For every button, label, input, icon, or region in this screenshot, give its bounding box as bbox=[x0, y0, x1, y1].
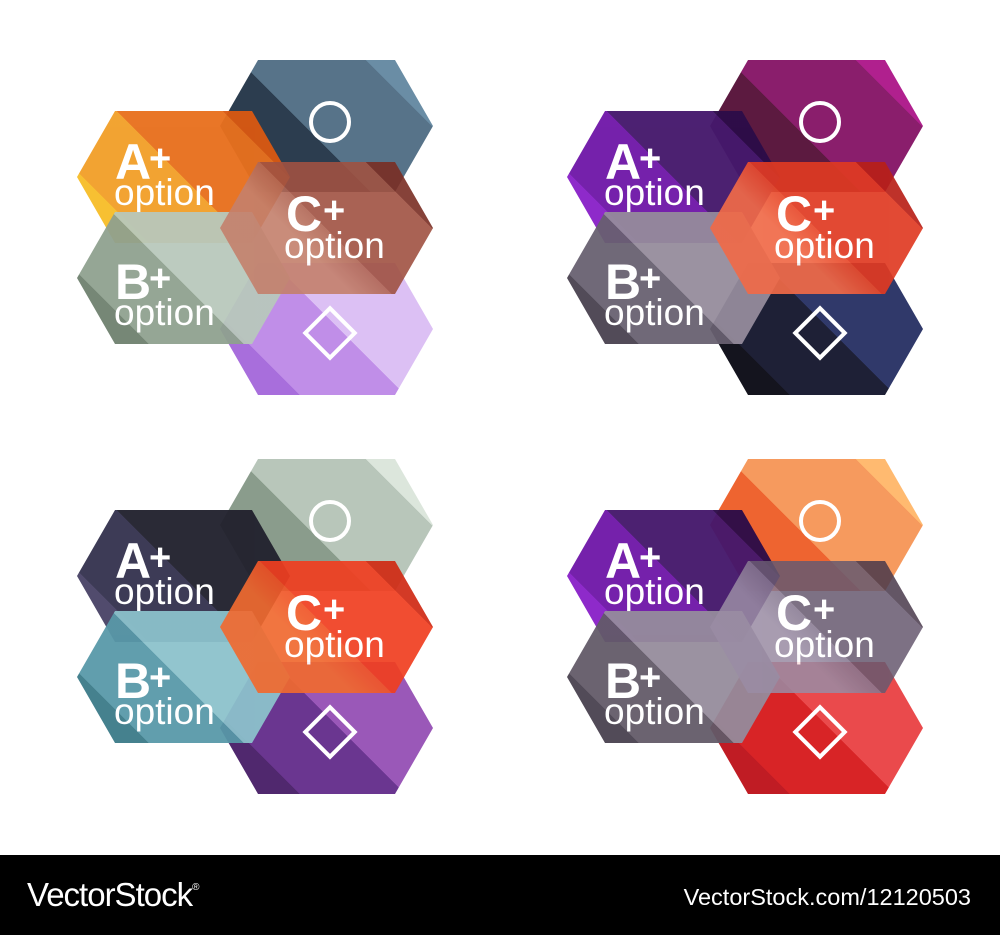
hexagon: B+ option bbox=[567, 611, 780, 743]
hexagon: A+ option: A bbox=[605, 134, 641, 190]
hexagon: A+ option: option bbox=[114, 571, 215, 612]
hexagon: C+ option: + bbox=[813, 190, 835, 232]
hexagon: circle (top) bbox=[710, 60, 923, 192]
footer band bbox=[0, 855, 1000, 935]
hexagon: A+ option bbox=[77, 111, 290, 243]
hexagon: C+ option: C bbox=[286, 585, 322, 641]
hexagon: A+ option bbox=[77, 510, 290, 642]
hexagon: B+ option: option bbox=[604, 691, 705, 732]
hexagon: A+ option: option bbox=[604, 571, 705, 612]
hexagon: C+ option: option bbox=[774, 225, 875, 266]
hexagon: A+ option: option bbox=[604, 172, 705, 213]
hexagon: B+ option: + bbox=[149, 258, 171, 300]
hexagon: A+ option: A bbox=[605, 533, 641, 589]
hexagon: A+ option: + bbox=[639, 537, 661, 579]
hexagon: circle (top) bbox=[710, 459, 923, 591]
hexagon: C+ option: option bbox=[284, 624, 385, 665]
group 1: top-left option set bbox=[77, 60, 433, 395]
hexagon: A+ option: + bbox=[149, 537, 171, 579]
hexagon: C+ option bbox=[710, 162, 923, 294]
hexagon: A+ option bbox=[567, 510, 780, 642]
hexagon: C+ option: C bbox=[286, 186, 322, 242]
group 2: top-right option set bbox=[567, 60, 923, 395]
hexagon: A+ option bbox=[567, 111, 780, 243]
hexagon: B+ option bbox=[77, 611, 290, 743]
hexagon: C+ option bbox=[710, 561, 923, 693]
hexagon: A+ option: A bbox=[115, 134, 151, 190]
hexagon: B+ option: B bbox=[605, 653, 641, 709]
hexagon: C+ option: option bbox=[774, 624, 875, 665]
footer: brand logo text: VectorStock bbox=[27, 876, 192, 913]
hexagon: diamond (bottom) bbox=[220, 263, 433, 395]
hexagon: diamond (bottom) bbox=[710, 662, 923, 794]
hexagon: C+ option: + bbox=[323, 190, 345, 232]
hexagon: A+ option: + bbox=[639, 138, 661, 180]
hexagon: B+ option: option bbox=[604, 292, 705, 333]
hexagon: C+ option: option bbox=[284, 225, 385, 266]
hexagon: B+ option: B bbox=[115, 254, 151, 310]
hexagon: B+ option: + bbox=[639, 258, 661, 300]
hexagon: C+ option: C bbox=[776, 585, 812, 641]
hexagon: circle (top) bbox=[220, 60, 433, 192]
hexagon: C+ option: + bbox=[813, 589, 835, 631]
hexagon: diamond (bottom) bbox=[220, 662, 433, 794]
hexagon: A+ option: A bbox=[115, 533, 151, 589]
hexagon: B+ option: + bbox=[149, 657, 171, 699]
group 3: bottom-left option set bbox=[77, 459, 433, 794]
hexagon: diamond (bottom) bbox=[710, 263, 923, 395]
hexagon: B+ option bbox=[567, 212, 780, 344]
hexagon: B+ option: B bbox=[115, 653, 151, 709]
hexagon: B+ option bbox=[77, 212, 290, 344]
hexagon: A+ option: option bbox=[114, 172, 215, 213]
hexagon: C+ option bbox=[220, 561, 433, 693]
hexagon: B+ option: + bbox=[639, 657, 661, 699]
hexagon: circle (top) bbox=[220, 459, 433, 591]
hexagon: B+ option: option bbox=[114, 292, 215, 333]
hexagon: C+ option: + bbox=[323, 589, 345, 631]
hexagon: C+ option bbox=[220, 162, 433, 294]
group 4: bottom-right option set bbox=[567, 459, 923, 794]
hexagon: C+ option: C bbox=[776, 186, 812, 242]
hexagon: A+ option: + bbox=[149, 138, 171, 180]
footer: image id url: VectorStock.com/12120503 bbox=[684, 884, 971, 910]
hexagon: B+ option: B bbox=[605, 254, 641, 310]
footer: brand logo text: ® bbox=[192, 882, 200, 893]
hexagon: B+ option: option bbox=[114, 691, 215, 732]
